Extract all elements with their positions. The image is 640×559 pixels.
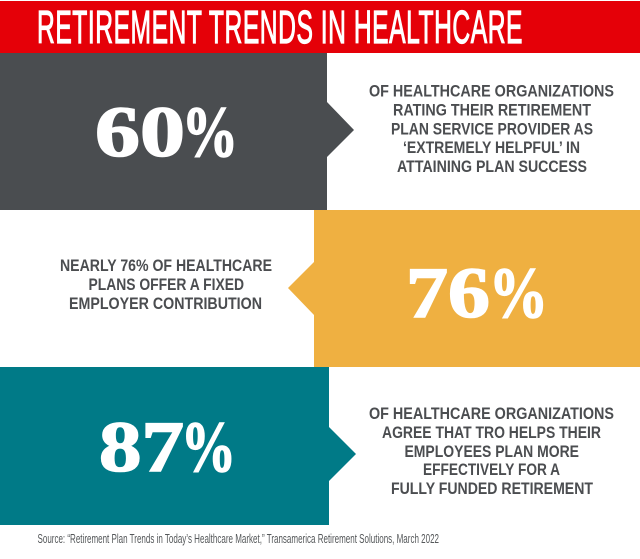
number: 76%: 76 xyxy=(406,253,490,333)
text block: 87% description: FULLY FUNDED RETIREMENT xyxy=(391,480,593,498)
number: 60%: % xyxy=(182,92,238,172)
panel: 87% stat xyxy=(0,367,356,525)
text block: 60% description: RATING THEIR RETIREMENT xyxy=(393,102,591,120)
number: 87%: 87 xyxy=(99,407,184,487)
number: 87% xyxy=(99,407,236,487)
number: 76% xyxy=(406,253,548,333)
text block: 76% description: EMPLOYER CONTRIBUTION xyxy=(69,295,262,313)
text block: 60% description: PLAN SERVICE PROVIDER AS xyxy=(391,120,593,138)
panel: 76% stat xyxy=(288,210,640,367)
gold arrow block xyxy=(288,210,640,367)
text block: 76% description: NEARLY 76% OF HEALTHCARE xyxy=(60,257,272,275)
text block: 87% description: EFFECTIVELY FOR A xyxy=(423,461,560,479)
number: 87%: % xyxy=(181,407,236,487)
teal arrow block xyxy=(0,367,356,525)
text block: 87% description: EMPLOYEES PLAN MORE xyxy=(404,443,579,461)
text block: 76% description xyxy=(60,257,272,313)
text block: 60% description: ATTAINING PLAN SUCCESS xyxy=(397,158,587,176)
text block: 87% description xyxy=(369,405,614,498)
title banner xyxy=(0,1,640,53)
grey arrow block xyxy=(0,53,354,210)
text block: 87% description: AGREE THAT TRO HELPS THEIR xyxy=(382,424,601,442)
number: 60%: 60 xyxy=(95,92,185,172)
text block: 60% description: ‘EXTREMELY HELPFUL’ IN xyxy=(403,139,580,157)
number: 60% xyxy=(95,92,238,172)
text block: 60% description xyxy=(369,82,614,176)
panel: 60% stat xyxy=(0,53,354,210)
text block: 76% description: PLANS OFFER A FIXED xyxy=(88,276,244,294)
number: 76%: % xyxy=(489,253,548,333)
